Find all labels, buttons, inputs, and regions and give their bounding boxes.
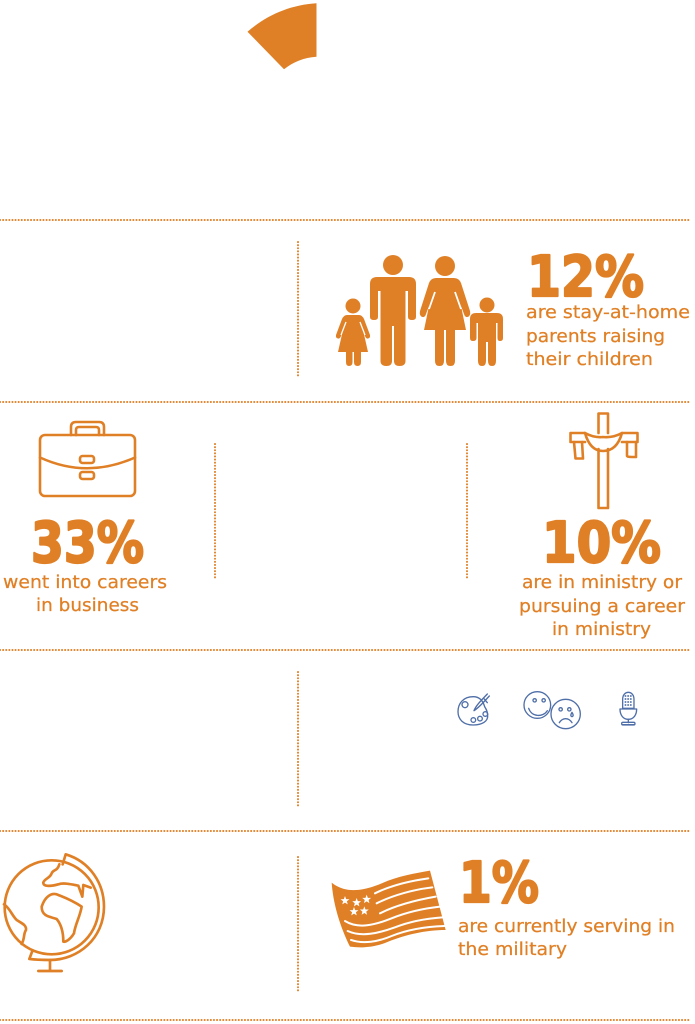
caption: in ministry: are in ministry or <box>522 572 683 593</box>
panel: careers in business <box>3 422 173 616</box>
caption: stay-at-home parents: parents raising <box>526 326 665 347</box>
panel: ministry <box>519 414 691 640</box>
caption: serving in the military: the military <box>458 939 567 960</box>
caption: stay-at-home parents: their children <box>526 349 653 370</box>
icon: american flag <box>332 871 446 947</box>
icon: cross with sash <box>570 414 638 508</box>
caption: in ministry: in ministry <box>552 619 651 640</box>
caption: careers in business: in business <box>36 595 139 616</box>
caption: stay-at-home parents: are stay-at-home <box>526 302 690 323</box>
icon: family <box>336 255 503 366</box>
stat: 1%: 1% <box>459 851 539 916</box>
panel: military <box>332 851 681 960</box>
caption: serving in the military: are currently serving in <box>458 916 675 937</box>
icon: microphone <box>620 692 637 725</box>
icon: briefcase <box>40 422 135 496</box>
stat: 12%: 12% <box>527 245 644 310</box>
caption: in ministry: pursuing a career <box>519 596 686 617</box>
icon: globe <box>4 854 104 971</box>
panel: stay-at-home parents <box>336 245 695 370</box>
icon: artist palette <box>458 694 489 725</box>
icon: happy and sad faces <box>524 692 580 729</box>
orange chart wedge <box>248 3 316 69</box>
stat: 10%: 10% <box>542 511 661 576</box>
caption: careers in business: went into careers <box>3 572 167 593</box>
stat: 33%: 33% <box>31 511 144 576</box>
